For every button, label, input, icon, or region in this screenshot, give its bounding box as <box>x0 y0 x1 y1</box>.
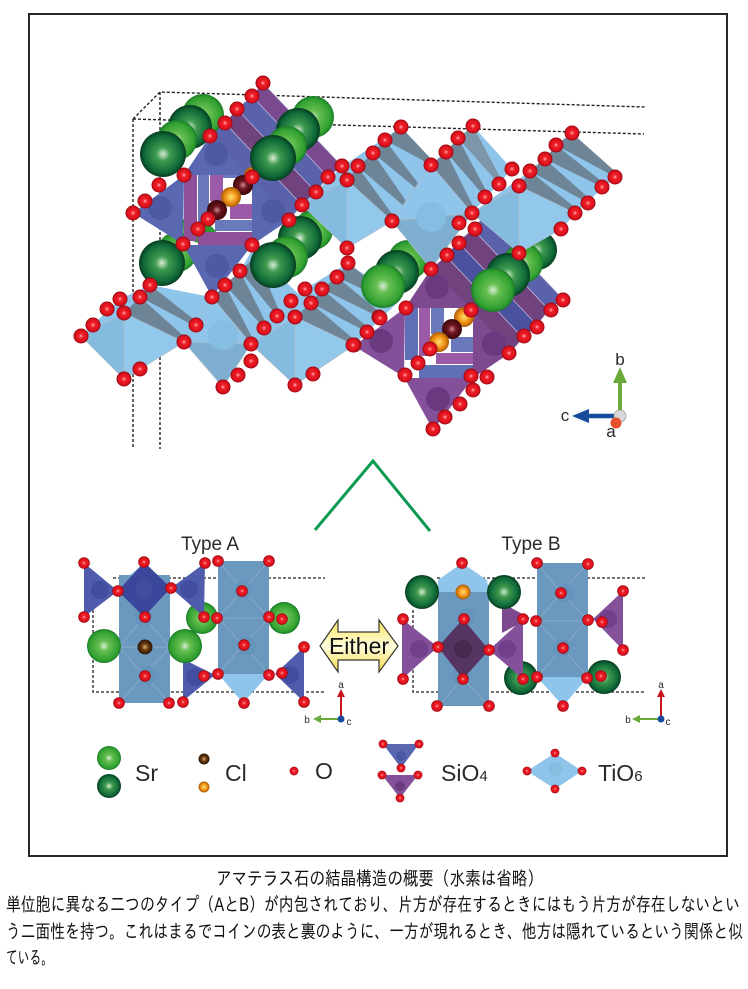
legend: Sr: Sr <box>135 760 158 786</box>
axes: main structure: b <box>615 350 625 369</box>
Sr and Cl front: Type B <box>405 575 521 609</box>
TiO6 columns: Type B <box>438 563 588 706</box>
oxygen atoms: Type B <box>397 557 629 712</box>
SiO4 back rows, block 2 <box>431 216 563 353</box>
figure frame <box>29 14 727 856</box>
axes: Type A: b <box>304 715 310 726</box>
legend: TiO6: TiO6 <box>598 760 643 786</box>
panel: Type A <box>78 534 351 728</box>
Either double arrow: Either <box>329 633 389 659</box>
legend: SiO4: SiO4 <box>441 760 488 786</box>
SiO4 tetrahedra block 1 with Cl chain <box>133 136 289 297</box>
lower TiO6 octahedra front <box>81 297 354 387</box>
Sr and Cl front: Type A <box>87 629 202 663</box>
legend: Cl <box>198 754 247 792</box>
axes: Type A: a <box>338 680 344 691</box>
axes: main structure: c <box>561 406 570 425</box>
dashed cell: Type A <box>93 578 325 692</box>
panel: Type B <box>397 534 670 728</box>
SiO4 tetrahedra block 2 with Cl chain <box>354 269 510 430</box>
Sr atoms front <box>139 131 530 312</box>
legend: O <box>290 758 333 784</box>
dashed unit cell outline <box>133 92 645 449</box>
TiO6 columns: Type A <box>119 561 269 703</box>
caption body: ている。 <box>6 948 53 969</box>
axes: main structure: a <box>606 422 616 441</box>
Sr atoms: Type A <box>186 602 300 634</box>
Either double arrow <box>320 620 398 672</box>
oxygen atoms <box>74 76 622 436</box>
legend: TiO6 <box>523 749 643 793</box>
Sr atoms behind: Type B <box>504 660 621 695</box>
axes: main structure <box>561 350 627 441</box>
SiO4 tetrahedra: Type A <box>84 562 304 702</box>
legend: Sr <box>97 746 158 798</box>
dashed cell: Type B <box>413 578 646 692</box>
SiO4 tetrahedra: Type B <box>402 591 623 679</box>
axes: Type A <box>304 680 352 728</box>
Sr atoms behind <box>157 94 557 294</box>
axes: Type B: c <box>666 717 670 728</box>
axes: Type A: c <box>346 717 352 728</box>
axes: Type B: a <box>658 680 664 691</box>
legend: SiO4 <box>378 740 488 802</box>
caption body <box>6 894 743 969</box>
axes: Type B <box>625 680 670 728</box>
legend: Cl: Cl <box>225 760 247 786</box>
caption title: アマテラス石の結晶構造の概要（水素は省略） <box>216 868 543 890</box>
panel: main crystal structure <box>74 76 645 449</box>
heading: Type A: Type A <box>181 534 239 555</box>
legend <box>97 740 643 802</box>
heading: Type B: Type B <box>501 534 561 555</box>
SiO4 back rows, block 1 <box>210 83 342 220</box>
legend: O: O <box>315 758 333 784</box>
upper TiO6 sheets <box>302 126 618 269</box>
purple back tetrahedra: Type B <box>502 603 530 633</box>
green chevron connector <box>315 461 430 531</box>
axes: Type B: b <box>625 715 631 726</box>
lower TiO6 sheets back <box>81 250 400 345</box>
oxygen atoms: Type A <box>78 555 310 709</box>
